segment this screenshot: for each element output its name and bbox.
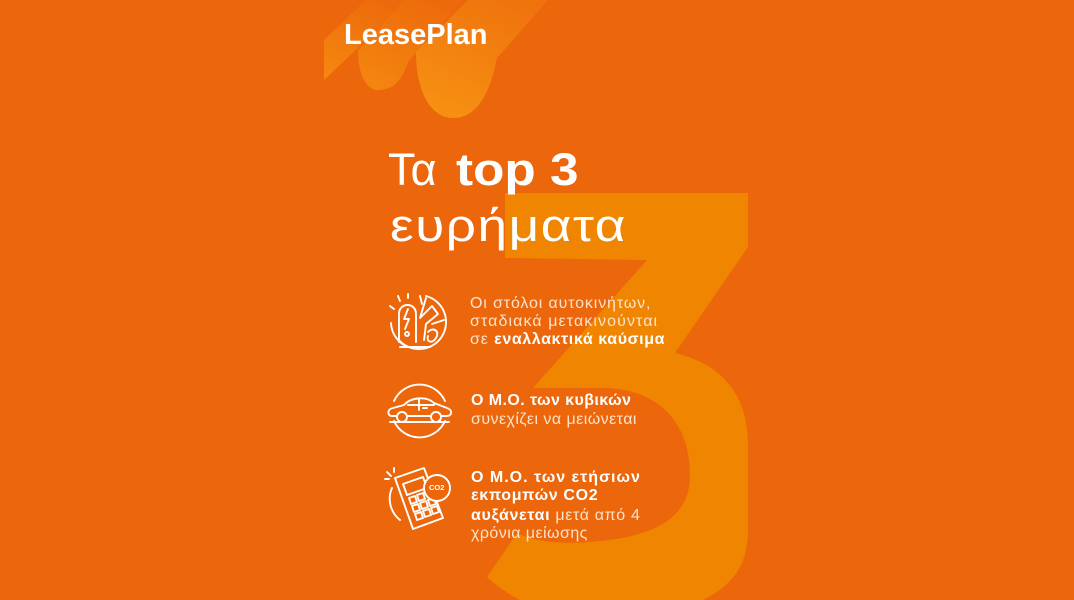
logo wave graphic — [324, 0, 548, 118]
text block: σταδιακά μετακινούνται — [470, 313, 658, 330]
icon: car in circle — [387, 384, 452, 438]
text block: χρόνια μείωσης — [471, 525, 588, 542]
text block — [470, 295, 665, 348]
finding 3 — [384, 467, 641, 542]
text block: αυξάνεται μετά από 4 — [471, 507, 641, 524]
title — [388, 144, 627, 251]
text block: Ο Μ.Ο. των ετήσιων — [471, 469, 641, 486]
large numeral 3 — [487, 193, 748, 600]
title: top 3 — [456, 144, 579, 195]
label: CO2: CO2 — [429, 483, 444, 492]
text block: σε εναλλακτικά καύσιμα — [470, 331, 665, 348]
finding 1 — [389, 293, 665, 350]
text block: Ο Μ.Ο. των κυβικών — [471, 392, 631, 409]
text block — [471, 469, 641, 504]
text block: Οι στόλοι αυτοκινήτων, — [470, 295, 651, 312]
icon: charger and globe — [389, 293, 447, 350]
title: Τα — [388, 144, 437, 195]
text block — [471, 507, 641, 542]
title: ευρήματα — [390, 200, 627, 251]
icon: calculator with CO2 bubble — [384, 467, 451, 530]
text block — [471, 392, 637, 428]
logo: LeasePlan: LeasePlan — [344, 19, 487, 51]
text block: συνεχίζει να μειώνεται — [471, 411, 637, 428]
text block: εκπομπών CO2 — [471, 487, 598, 504]
finding 2 — [387, 384, 637, 438]
